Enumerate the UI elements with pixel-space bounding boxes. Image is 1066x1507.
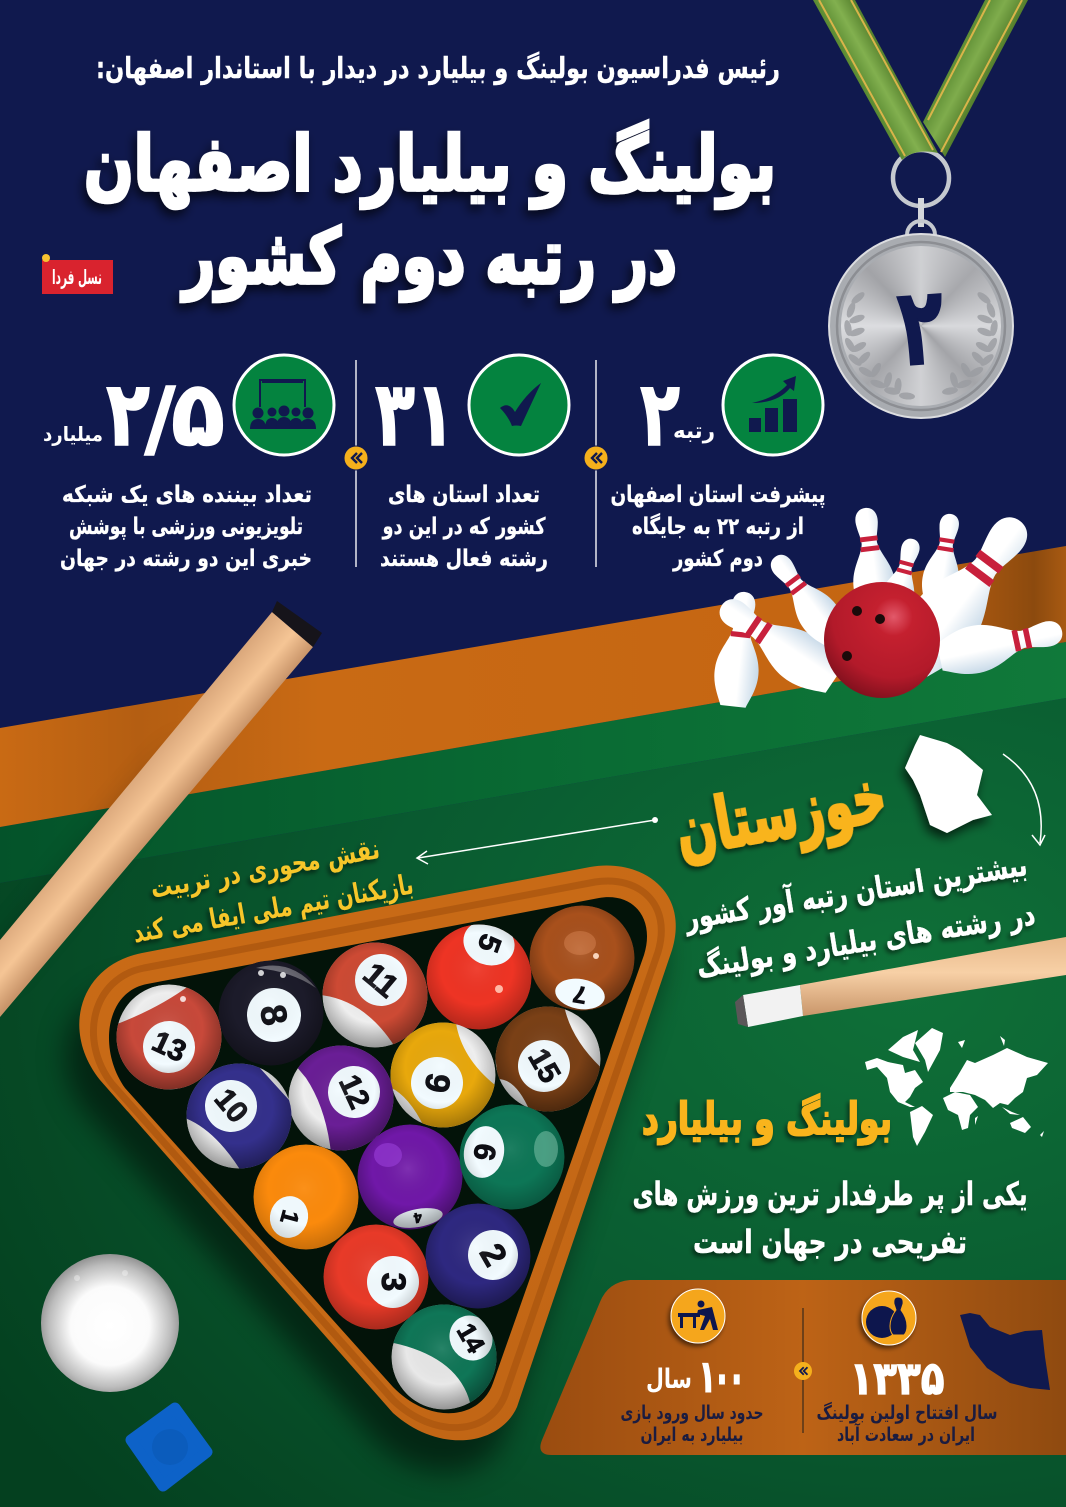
stat number <box>106 362 225 467</box>
ball 2: 2 <box>472 1237 514 1273</box>
number 100: ۱۰۰ <box>700 1352 744 1401</box>
laurel right <box>942 290 999 396</box>
ball 3 <box>324 1224 428 1330</box>
Khuzestan map <box>905 735 992 833</box>
ball 8: 8 <box>252 1002 296 1028</box>
panel background <box>540 1280 1066 1455</box>
stat description <box>610 482 826 572</box>
stat description: دوم کشور <box>672 546 763 572</box>
orange info panel <box>540 1280 1066 1455</box>
logo: نسل فردا <box>52 265 102 289</box>
subtitle: رئیس فدراسیون بولینگ و بیلیارد در دیدار با استاندار اصفهان: <box>96 51 780 85</box>
title line 2: در رتبه دوم کشور <box>180 212 677 302</box>
ball 9 yellow <box>390 1022 496 1128</box>
heading: bowling and billiard: بولینگ و بیلیارد <box>642 1094 892 1145</box>
world text <box>632 1175 1028 1261</box>
orange wood band <box>0 546 1066 827</box>
stat description: تعداد استان های <box>388 482 540 508</box>
ribbon right <box>923 0 1028 157</box>
pins <box>708 500 1066 709</box>
ball 7: 7 <box>571 980 589 1008</box>
stat number: ۲ <box>106 362 150 467</box>
ball 11: 11 <box>356 955 406 1005</box>
icon: growth chart <box>723 355 823 455</box>
ball 5 <box>426 913 532 1030</box>
ring <box>893 150 949 206</box>
arrow: curved <box>1003 754 1045 845</box>
stat number: ۲ <box>640 362 680 467</box>
ball 9 yellow: 9 <box>417 1070 457 1096</box>
stat: provinces <box>375 355 569 572</box>
rack wood stripe <box>93 881 661 1428</box>
cue stick right <box>735 937 1066 1027</box>
ball 12: 12 <box>332 1070 376 1114</box>
chevron 2 <box>344 446 368 470</box>
medal <box>813 0 1028 418</box>
yellow caption: نقش محوری در تربیت <box>148 832 382 905</box>
ball 13 <box>116 984 222 1090</box>
chevron 1 <box>584 446 608 470</box>
stat unit: رتبه <box>673 419 715 444</box>
number 100 <box>646 1352 744 1401</box>
ball 6: 6 <box>466 1141 502 1163</box>
arrow dot <box>652 817 658 823</box>
medal number: ۲ <box>894 264 948 391</box>
chalk cube <box>131 1408 207 1486</box>
ball 8 <box>218 960 324 1066</box>
arrow: pointer to triangle <box>417 820 655 864</box>
yellow caption <box>130 832 416 949</box>
stat description: از رتبه ۲۲ به جایگاه <box>632 513 804 540</box>
icon: bowling <box>862 1291 916 1345</box>
stat description <box>60 482 312 572</box>
laurel left <box>843 290 915 400</box>
ball 4 <box>358 1124 462 1231</box>
label 1335: سال افتتاح اولین بولینگ <box>816 1401 998 1424</box>
world text: تفریحی در جهان است <box>693 1223 967 1261</box>
stat description: خبری این دو رشته در جهان <box>60 546 312 572</box>
green table rail <box>0 642 1066 883</box>
cue cap <box>272 601 322 647</box>
yellow caption: بازیکنان تیم ملی ایفا می کند <box>130 868 416 949</box>
stat number: ۳۱ <box>375 362 455 467</box>
ball 5: 5 <box>471 930 507 956</box>
Iran map <box>960 1313 1050 1390</box>
ball 12 <box>288 1046 394 1150</box>
cue ball <box>41 1254 179 1392</box>
icon: audience <box>234 355 334 455</box>
stat description: پیشرفت استان اصفهان <box>610 482 826 508</box>
billiard triangle rack <box>65 866 676 1472</box>
rack wood <box>79 866 676 1440</box>
bowling pins and ball <box>708 500 1066 709</box>
stat: rank <box>610 355 826 572</box>
panel chevron <box>794 1362 812 1380</box>
rack inside <box>109 897 647 1413</box>
label 100: بیلیارد به ایران <box>640 1424 744 1446</box>
rack shadow <box>65 898 662 1472</box>
icon: check mark <box>469 355 569 455</box>
icon: billiard player <box>671 1289 725 1343</box>
title <box>84 119 776 302</box>
ball 14 <box>392 1304 496 1410</box>
ball 13: 13 <box>147 1025 191 1069</box>
ball 10 <box>186 1064 292 1168</box>
ball 15 <box>496 1006 600 1112</box>
ball 7 <box>530 906 634 1013</box>
table felt background <box>0 698 1066 1507</box>
stat description <box>380 482 548 572</box>
stat description: رشته فعال هستند <box>380 546 548 572</box>
logo <box>42 254 113 294</box>
panel divider <box>802 1308 804 1433</box>
stat description: تلویزیونی ورزشی با پوشش <box>69 514 303 540</box>
label 100 <box>620 1402 764 1446</box>
title line 1: بولینگ و بیلیارد اصفهان <box>84 119 776 209</box>
ribbon left <box>813 0 938 160</box>
ball 1: 1 <box>274 1207 304 1227</box>
cue wood <box>0 612 313 1017</box>
stat: viewers <box>43 355 334 572</box>
label 1335 <box>816 1401 998 1446</box>
medal link <box>907 198 935 235</box>
ball 6 <box>460 1104 564 1210</box>
ball 4: 4 <box>413 1209 423 1227</box>
number 1335: ۱۳۳۵ <box>850 1351 944 1405</box>
ball 2 <box>426 1204 530 1308</box>
world map <box>865 1028 1048 1146</box>
stat number: ۵ <box>171 362 225 467</box>
number 100: سال <box>646 1364 692 1395</box>
stat number: / <box>145 369 176 467</box>
heading: Khuzestan: خوزستان <box>669 753 893 874</box>
label 1335: ایران در سعادت آباد <box>837 1422 975 1446</box>
medal disc <box>829 234 1013 418</box>
stat description: تعداد بیننده های یک شبکه <box>62 482 312 508</box>
ball 15: 15 <box>521 1043 567 1089</box>
ball 11 <box>322 942 428 1048</box>
ball 14: 14 <box>451 1318 491 1358</box>
ball 1 <box>254 1144 358 1250</box>
ball 3: 3 <box>374 1273 412 1291</box>
stat dividers <box>356 360 596 567</box>
ball 10: 10 <box>208 1083 254 1129</box>
cue stick top left <box>0 601 322 1017</box>
bowling ball <box>824 582 940 698</box>
label 100: حدود سال ورود بازی <box>620 1402 764 1424</box>
Khuzestan text <box>681 845 1038 986</box>
stat description: کشور که در این دو <box>382 514 546 540</box>
stat unit: میلیارد <box>43 422 103 446</box>
